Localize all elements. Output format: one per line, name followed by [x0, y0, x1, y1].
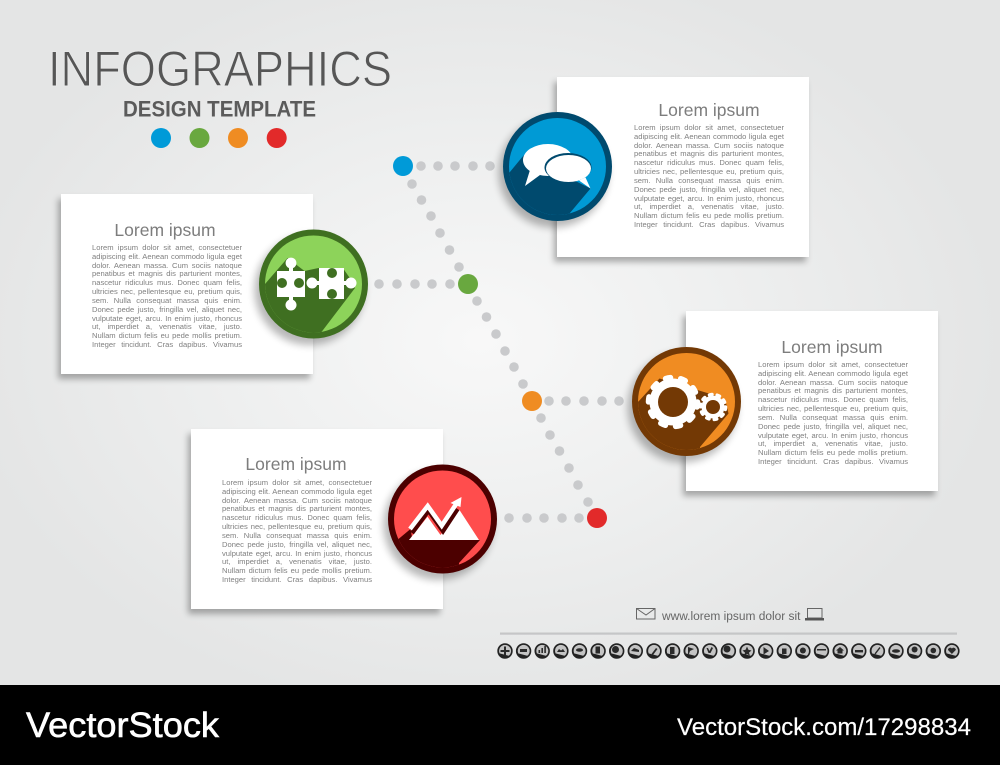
- icon: growth chart badge: [382, 464, 497, 580]
- text block: right card: nascetur ridiculus mus. Donec quam felis,: [758, 395, 908, 404]
- text block: left card: dolor. Aenean massa. Cum sociis natoque: [92, 261, 242, 270]
- text block: right card: adipiscing elit. Aenean commodo ligula eget: [758, 369, 908, 378]
- node: red: [587, 508, 607, 528]
- node: blue: [393, 156, 413, 176]
- text block: right card: Nullam dictum felis eu pede mollis pretium.: [758, 448, 908, 457]
- footer divider: [500, 632, 957, 635]
- node: green: [458, 274, 478, 294]
- text block: left card: adipiscing elit. Aenean commodo ligula eget: [92, 252, 242, 261]
- icon: puzzle pieces badge: [254, 230, 368, 345]
- text block: top right card: Lorem ipsum dolor sit amet, consectetuer: [634, 123, 784, 132]
- text block: left card: Nullam dictum felis eu pede mollis pretium.: [92, 331, 242, 340]
- text block: right card: Lorem ipsum dolor sit amet, consectetuer: [758, 360, 908, 369]
- text block: top right card: dolor. Aenean massa. Cum sociis natoque: [634, 141, 784, 150]
- text block: right card: [758, 360, 908, 466]
- icon: gears badge: [626, 347, 741, 462]
- text block: left card: vulputate eget, arcu. In enim justo, rhoncus: [92, 314, 242, 322]
- text block: left card: ut, imperdiet a, venenatis vitae, justo.: [92, 322, 242, 331]
- text block: right card: Donec pede justo, fringilla vel, aliquet nec,: [758, 422, 908, 431]
- text block: bottom left card: ut, imperdiet a, venenatis vitae, justo.: [222, 557, 372, 566]
- text block: top right card: [634, 123, 784, 229]
- title: INFOGRAPHICS: [48, 41, 392, 97]
- text block: bottom left card: Nullam dictum felis eu pede mollis pretium.: [222, 566, 372, 575]
- panel: right card: [686, 311, 938, 491]
- text block: right card: Integer tincidunt. Cras dapibus. Vivamus: [758, 457, 908, 466]
- text block: left card: Donec pede justo, fringilla vel, aliquet nec,: [92, 305, 242, 314]
- panel: top right card: [557, 77, 809, 257]
- panel: left card: [61, 194, 313, 374]
- text block: left card: nascetur ridiculus mus. Donec quam felis,: [92, 278, 242, 287]
- text block: left card: [92, 243, 242, 349]
- text block: left card: Lorem ipsum dolor sit amet, consectetuer: [92, 243, 242, 252]
- text block: left card: sem. Nulla consequat massa quis enim.: [92, 296, 242, 305]
- heading: top right card: Lorem ipsum: [658, 100, 760, 120]
- icon: envelope: [636, 608, 655, 619]
- text block: top right card: vulputate eget, arcu. In enim justo, rhoncus: [634, 194, 784, 202]
- text block: bottom left card: Lorem ipsum dolor sit amet, consectetuer: [222, 478, 372, 487]
- text block: bottom left card: nascetur ridiculus mus. Donec quam felis,: [222, 513, 372, 522]
- text block: right card: penatibus et magnis dis parturient montes,: [758, 386, 908, 395]
- text block: top right card: sem. Nulla consequat massa quis enim.: [634, 176, 784, 185]
- icon: laptop: [805, 608, 824, 620]
- website text: www.lorem ipsum dolor sit: [661, 609, 801, 623]
- text block: right card: vulputate eget, arcu. In enim justo, rhoncus: [758, 430, 908, 440]
- text block: bottom left card: dolor. Aenean massa. Cum sociis natoque: [222, 496, 372, 505]
- text block: bottom left card: Donec pede justo, fringilla vel, aliquet nec,: [222, 540, 372, 549]
- text block: bottom left card: vulputate eget, arcu. In enim justo, rhoncus: [222, 548, 372, 558]
- text block: left card: Integer tincidunt. Cras dapibus. Vivamus: [92, 340, 242, 349]
- dotted connector path: [374, 161, 624, 523]
- footer bar: [0, 685, 1000, 765]
- text block: left card: ultricies nec, pellentesque eu, pretium quis,: [92, 287, 242, 296]
- text block: top right card: Nullam dictum felis eu pede mollis pretium.: [634, 211, 784, 220]
- text block: right card: sem. Nulla consequat massa quis enim.: [758, 413, 908, 422]
- text block: bottom left card: adipiscing elit. Aenean commodo ligula eget: [222, 487, 372, 496]
- text block: left card: penatibus et magnis dis parturient montes,: [92, 269, 242, 278]
- text block: bottom left card: penatibus et magnis dis parturient montes,: [222, 504, 372, 513]
- subtitle: DESIGN TEMPLATE: [123, 96, 316, 122]
- heading: left card: Lorem ipsum: [114, 220, 216, 240]
- brand logo text: VectorStock: [26, 706, 220, 745]
- icon row: [497, 643, 960, 659]
- text block: top right card: ut, imperdiet a, venenatis vitae, justo.: [634, 202, 784, 211]
- text block: top right card: nascetur ridiculus mus. Donec quam felis,: [634, 158, 784, 167]
- text block: bottom left card: ultricies nec, pellentesque eu, pretium quis,: [222, 522, 372, 531]
- colour dots legend: [151, 128, 287, 148]
- text block: right card: ut, imperdiet a, venenatis vitae, justo.: [758, 439, 908, 448]
- node: orange: [522, 391, 542, 411]
- text block: top right card: adipiscing elit. Aenean commodo ligula eget: [634, 132, 784, 141]
- text block: bottom left card: [222, 478, 372, 584]
- heading: bottom left card: Lorem ipsum: [245, 454, 347, 474]
- text block: top right card: penatibus et magnis dis parturient montes,: [634, 149, 784, 158]
- image id text: VectorStock.com/17298834: [677, 714, 971, 741]
- icon: speech bubbles badge: [498, 112, 612, 228]
- text block: right card: dolor. Aenean massa. Cum sociis natoque: [758, 378, 908, 387]
- text block: bottom left card: sem. Nulla consequat massa quis enim.: [222, 531, 372, 540]
- text block: top right card: Integer tincidunt. Cras dapibus. Vivamus: [634, 220, 784, 229]
- text block: bottom left card: Integer tincidunt. Cras dapibus. Vivamus: [222, 575, 372, 584]
- text block: top right card: ultricies nec, pellentesque eu, pretium quis,: [634, 167, 784, 176]
- text block: top right card: Donec pede justo, fringilla vel, aliquet nec,: [634, 185, 784, 194]
- heading: right card: Lorem ipsum: [781, 337, 883, 357]
- panel: bottom left card: [191, 429, 443, 609]
- text block: right card: ultricies nec, pellentesque eu, pretium quis,: [758, 404, 908, 413]
